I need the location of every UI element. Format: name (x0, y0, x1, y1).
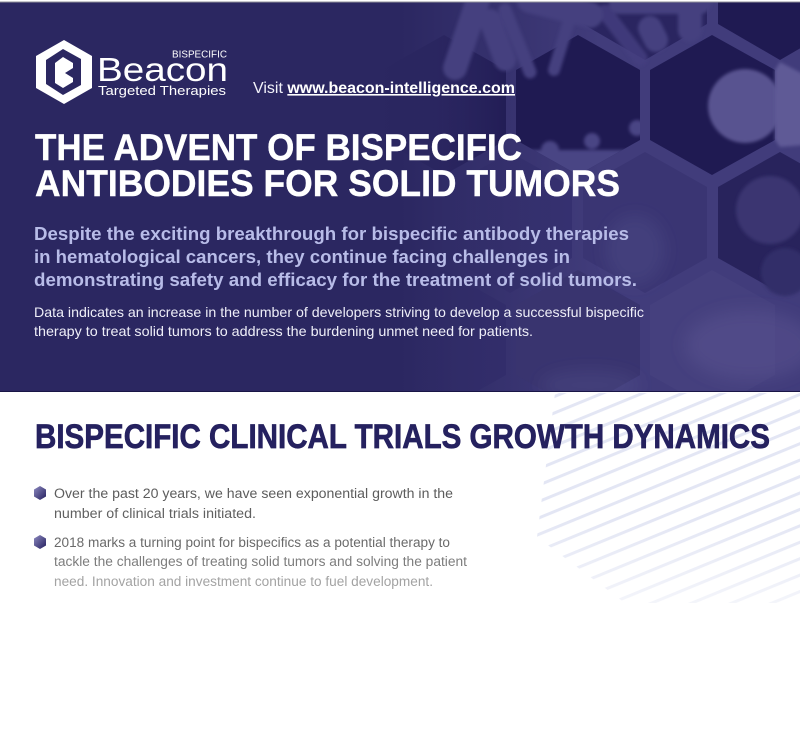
decorative stripes (537, 393, 800, 603)
title: ANTIBODIES FOR SOLID TUMORS (35, 163, 620, 204)
logo wordmark: Beacon (97, 51, 228, 88)
logo (36, 40, 228, 104)
bullet: 2018 turning point: need. Innovation and investment continue to fuel development. (54, 574, 433, 589)
bullet: exponential growth: number of clinical trials initiated. (54, 506, 256, 521)
supporting text (34, 304, 644, 339)
logo wordmark: Targeted Therapies (98, 83, 227, 98)
bullet: 2018 turning point (34, 535, 467, 589)
bottom edge line (0, 391, 800, 392)
icon: hexagon B mark (36, 40, 92, 104)
bullet: 2018 turning point: tackle the challenges of treating solid tumors and solving the patient (54, 554, 467, 569)
icon: hexagon bullet (34, 486, 46, 500)
top edge line (0, 0, 800, 2)
intro lead text: in hematological cancers, they continue facing challenges in (34, 247, 570, 267)
logo wordmark (97, 50, 228, 98)
website link: Visit www.beacon-intelligence.com (253, 80, 515, 97)
intro lead text: Despite the exciting breakthrough for bispecific antibody therapies (34, 224, 629, 244)
supporting text: therapy to treat solid tumors to address the burdening unmet need for patients. (34, 323, 533, 339)
bullet: 2018 turning point: 2018 marks a turning point for bispecifics as a potential therapy to (54, 535, 450, 550)
icon: hexagon bullet (34, 535, 46, 549)
supporting text: Data indicates an increase in the number of developers striving to develop a successful bispecific (34, 304, 644, 320)
title: THE ADVENT OF BISPECIFIC (35, 127, 522, 168)
microscopy background with hexagons (442, 2, 800, 391)
bullet: exponential growth (34, 486, 453, 521)
logo wordmark: BISPECIFIC (172, 50, 227, 60)
cells (708, 69, 782, 143)
panel: header banner (0, 0, 800, 410)
bumpy cell across hex (532, 118, 640, 172)
intro lead text (34, 224, 637, 290)
intro lead text: demonstrating safety and efficacy for the treatment of solid tumors. (34, 270, 637, 290)
fingers top (455, 0, 700, 72)
bullet: exponential growth: Over the past 20 years, we have seen exponential growth in the (54, 486, 453, 501)
title (35, 127, 620, 204)
